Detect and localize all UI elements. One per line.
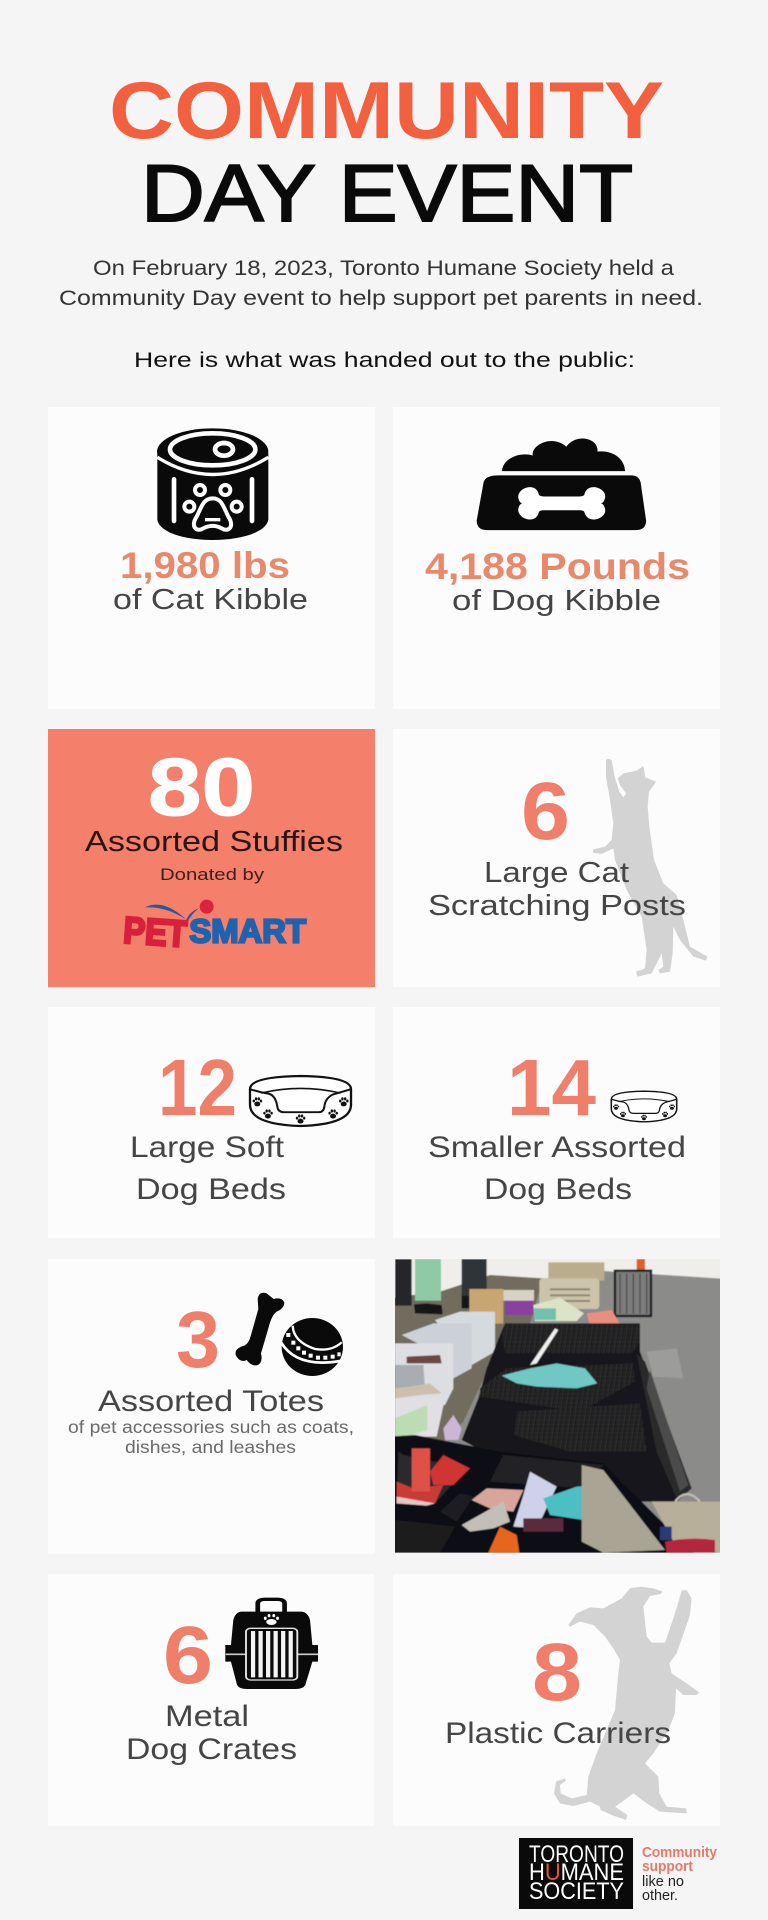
logo: petsmart xyxy=(122,900,306,955)
description: totes xyxy=(68,1417,354,1457)
tagline xyxy=(642,1845,717,1904)
stat: large beds: 12 xyxy=(158,1043,237,1132)
icon: dog bowl xyxy=(477,438,646,530)
tagline: other. xyxy=(642,1888,678,1904)
label: smaller beds: Smaller Assorted xyxy=(428,1131,686,1164)
label: stuffies: Assorted Stuffies xyxy=(85,826,343,858)
logo: toronto humane society: SOCIETY xyxy=(529,1878,624,1905)
label: large beds: Dog Beds xyxy=(136,1173,286,1206)
photo: donated supplies at the event xyxy=(395,1259,720,1553)
tagline: support xyxy=(642,1859,693,1875)
label: metal crates: Dog Crates xyxy=(126,1733,297,1766)
label: plastic carriers: Plastic Carriers xyxy=(445,1717,671,1750)
stat: stuffies: 80 xyxy=(148,742,255,833)
intro text: On February 18, 2023, Toronto Humane Society held a xyxy=(93,257,674,280)
logo: toronto humane society: TORONTO xyxy=(529,1841,624,1868)
stat: smaller beds: 14 xyxy=(507,1043,597,1132)
logo: toronto humane society xyxy=(519,1838,633,1909)
panel: cat scratching posts xyxy=(393,729,720,987)
label: large beds xyxy=(130,1131,286,1206)
tagline: Community xyxy=(642,1845,717,1861)
panel: dog kibble xyxy=(393,407,720,709)
logo: petsmart: SMART xyxy=(189,913,306,950)
logo: toronto humane society: HUMANE xyxy=(529,1859,624,1886)
label: scratching posts xyxy=(428,857,686,922)
label: metal crates: Metal xyxy=(165,1700,249,1733)
label: large beds: Large Soft xyxy=(130,1131,285,1164)
stat: scratching posts: 6 xyxy=(521,766,570,857)
stat: cat kibble amount: 1,980 lbs xyxy=(120,545,290,586)
stat: dog kibble amount: 4,188 Pounds xyxy=(425,546,690,587)
panel: cat kibble xyxy=(48,407,375,709)
label: scratching posts: Scratching Posts xyxy=(428,890,686,922)
panel: smaller dog beds xyxy=(393,1007,720,1238)
icon: cat silhouette xyxy=(593,759,707,977)
label: donated by: Donated by xyxy=(160,865,265,884)
icon: pet carrier xyxy=(225,1599,318,1689)
panel: metal dog crates xyxy=(48,1574,374,1826)
stat: totes: 3 xyxy=(176,1295,220,1384)
label: smaller beds xyxy=(428,1131,686,1206)
icon: bone xyxy=(236,1293,284,1365)
title line: community: COMMUNITY xyxy=(109,66,664,156)
label: metal crates xyxy=(126,1700,297,1766)
icon: large dog bed xyxy=(250,1076,351,1126)
icon: ball xyxy=(281,1318,343,1376)
icon: small dog bed xyxy=(611,1091,677,1122)
icon: cat food can xyxy=(157,428,268,540)
stat: plastic carriers: 8 xyxy=(532,1627,582,1718)
tagline: like no xyxy=(642,1874,684,1890)
description: totes: dishes, and leashes xyxy=(125,1437,296,1457)
label: dog kibble: of Dog Kibble xyxy=(452,585,661,617)
label: cat kibble: of Cat Kibble xyxy=(113,584,308,616)
intro text xyxy=(59,257,703,310)
panel: large dog beds xyxy=(48,1007,375,1238)
intro text: Community Day event to help support pet parents in need. xyxy=(59,287,703,310)
title line: day event: DAY EVENT xyxy=(141,149,633,239)
description: totes: of pet accessories such as coats, xyxy=(68,1417,354,1437)
panel: stuffies xyxy=(48,729,375,987)
label: scratching posts: Large Cat xyxy=(484,857,629,889)
stat: metal crates: 6 xyxy=(163,1610,213,1701)
label: smaller beds: Dog Beds xyxy=(484,1173,632,1206)
subheading: Here is what was handed out to the public: xyxy=(134,349,635,372)
title xyxy=(109,66,664,239)
panel: plastic carriers xyxy=(393,1574,720,1826)
logo: petsmart: PET xyxy=(122,909,188,955)
label: totes: Assorted Totes xyxy=(98,1385,324,1418)
icon: dog silhouette xyxy=(554,1587,699,1820)
panel: totes xyxy=(48,1259,375,1554)
